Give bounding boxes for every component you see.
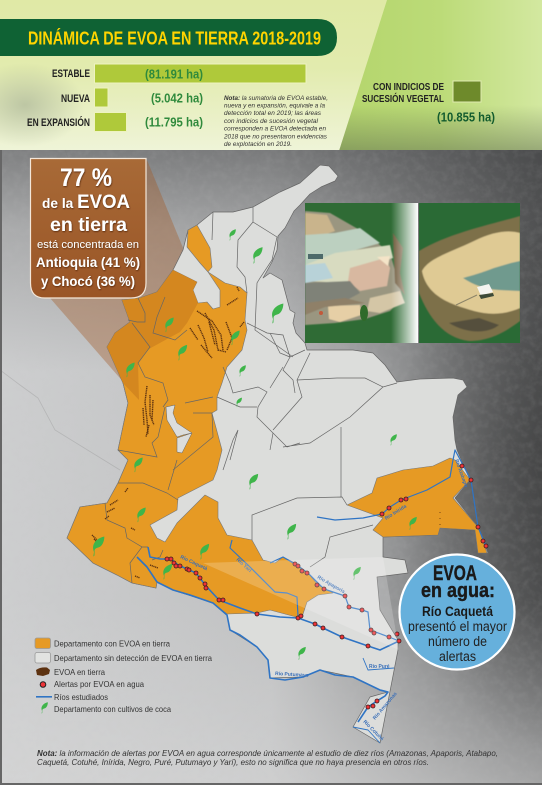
note: water alerts: Nota: la información de alertas por EVOA en agua corresponde únicamente al estudio de diez ríos (Amazonas, Apaporis, Atabapo, (37, 748, 498, 758)
river labels: Río Apaporis (316, 575, 346, 595)
departments with EVOA (67, 225, 333, 618)
river labels: Río Inírida (384, 504, 408, 522)
legend: Alertas por EVOA en agua (54, 679, 144, 689)
callout: 77 % of EVOA: y Chocó (36 %) (41, 274, 135, 289)
legend: Departamento sin detección de EVOA en tierra (54, 653, 212, 663)
departments without EVOA (67, 165, 488, 743)
panel: vegetal succession (362, 81, 495, 124)
note: EVOA sum: con indicios de sucesión vegetal (224, 118, 319, 125)
panel: vegetal succession: SUCESIÓN VEGETAL (362, 92, 444, 105)
note: water alerts (37, 748, 498, 767)
alerts: EVOA in water (165, 464, 488, 709)
light wedge to water callout (203, 557, 399, 650)
note: EVOA sum: 2018 que no presentaron evidencias (223, 133, 328, 140)
note: EVOA sum: de explotación en 2019. (224, 141, 292, 148)
callout: EVOA in water: presentó el mayor (408, 619, 507, 634)
panel: vegetal succession: (10.855 ha) (437, 110, 495, 124)
note: EVOA sum: nueva y en expansión, equivale a la (224, 102, 326, 110)
note: EVOA sum: corresponden a EVOA detectada en (224, 126, 327, 132)
rivers (137, 450, 486, 743)
legend: Departamento con cultivos de coca (54, 704, 171, 714)
photo: mining pit (305, 203, 418, 343)
river labels: Río Yarí (235, 557, 253, 574)
title: DINÁMICA DE EVOA EN TIERRA 2018-2019 (28, 28, 321, 48)
callout: 77 % of EVOA: Antioquia (41 %) (36, 255, 140, 270)
river labels: Río Amazonas (372, 691, 399, 721)
bar chart: EVOA dynamics: EN EXPANSIÓN (27, 116, 90, 129)
inner valley (166, 405, 192, 453)
coca crop leaves (93, 229, 417, 660)
callout wedge: projection to departments (50, 160, 197, 400)
legend: Ríos estudiados (54, 692, 108, 702)
note: EVOA sum: detección total en 2019; las áreas (224, 110, 322, 117)
callout: EVOA in water (400, 554, 514, 670)
river labels (179, 459, 469, 742)
callout: EVOA in water: Río Caquetá (422, 604, 493, 619)
callout: 77 % of EVOA: está concentrada en (37, 239, 139, 251)
note: water alerts: Caquetá, Cotuhé, Inírida, Negro, Puré, Putumayo y Yarí), esto no significa que no haya presencia en otros ríos. (37, 757, 429, 767)
river labels: Río Atabapo (453, 459, 469, 488)
Antioquia and Chocó highlight (107, 270, 198, 400)
callout: EVOA in water: alertas (439, 649, 476, 664)
callout: EVOA in water: número de (428, 634, 487, 649)
photo: water dredge (419, 203, 520, 343)
map: Colombia (67, 165, 488, 743)
callout: 77 % of EVOA (30, 158, 146, 298)
legend (35, 638, 212, 714)
legend: Departamento con EVOA en tierra (54, 638, 170, 648)
river labels: Río Puré (369, 664, 390, 670)
bar chart: EVOA dynamics: ESTABLE (52, 68, 90, 80)
header background (0, 0, 542, 151)
note: EVOA sum (223, 95, 328, 148)
callout: 77 % of EVOA: 77 % (60, 164, 112, 192)
callout: EVOA in water: en agua: (421, 580, 495, 602)
bar chart: EVOA dynamics: (81.191 ha) (145, 66, 203, 82)
bar chart: EVOA dynamics: NUEVA (61, 93, 90, 105)
title banner (0, 19, 337, 56)
panel: vegetal succession: CON INDICIOS DE (373, 81, 444, 93)
river labels: Río Cotuhé (362, 719, 385, 742)
bar chart: EVOA dynamics: (5.042 ha) (151, 90, 203, 106)
callout: 77 % of EVOA: en tierra (50, 215, 127, 236)
note: EVOA sum: Nota: la sumatoria de EVOA estable, (224, 95, 328, 102)
callout: 77 % of EVOA: de la EVOA (42, 192, 130, 213)
river labels: Río Putumayo (275, 671, 309, 679)
bar chart: EVOA dynamics (27, 64, 306, 132)
bar chart: EVOA dynamics: (11.795 ha) (145, 114, 203, 130)
callout: EVOA in water: EVOA (433, 562, 477, 585)
EVOA on land: mining patches (92, 287, 440, 578)
department Vichada region (347, 458, 487, 553)
legend: EVOA en tierra (54, 667, 105, 677)
river labels: Río Caquetá (179, 554, 208, 572)
department boundaries (105, 207, 397, 583)
